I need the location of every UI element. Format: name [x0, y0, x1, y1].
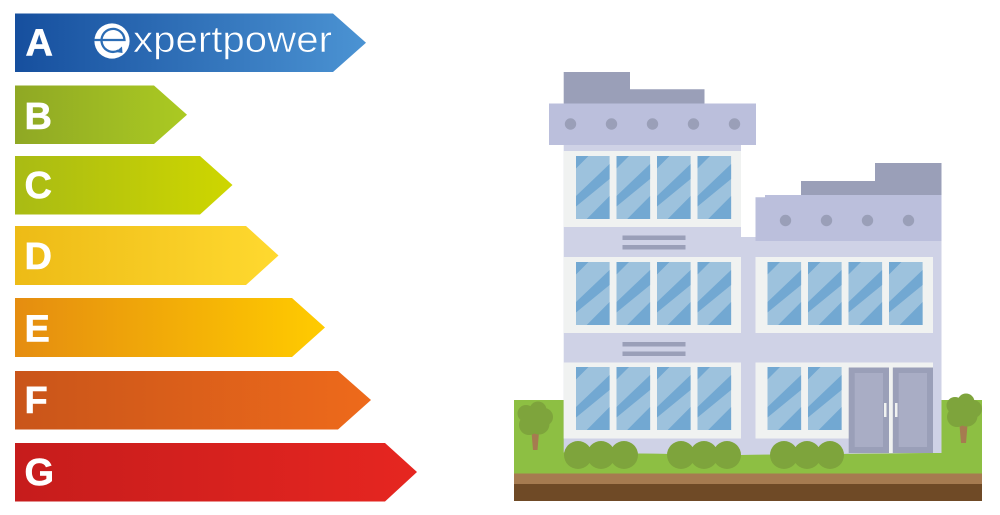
windows [576, 156, 923, 430]
double door [849, 368, 933, 453]
window frames [564, 151, 933, 438]
tree right [946, 394, 982, 443]
arrow G [15, 443, 417, 502]
arrow A with logo: A [26, 22, 53, 64]
front grass [564, 452, 942, 474]
shrubs [564, 441, 844, 469]
rooftop panel right [756, 195, 942, 241]
logo: expertpower: xpertpower [133, 19, 332, 60]
arrow E: E [24, 308, 50, 350]
arrow F: F [24, 380, 48, 422]
arrow B [15, 86, 187, 144]
arrow D: D [24, 236, 52, 278]
arrow D [15, 226, 278, 285]
rooftop units left [564, 72, 704, 104]
building illustration [514, 72, 982, 501]
tree left [518, 402, 553, 450]
vent lines [622, 236, 686, 356]
arrow E [15, 298, 325, 357]
rooftop panel left [549, 104, 756, 145]
arrow B: B [24, 96, 52, 138]
arrow G: G [24, 452, 54, 494]
walls [564, 145, 942, 455]
arrow C [15, 156, 232, 214]
energy rating scale [15, 14, 417, 502]
arrow F [15, 371, 371, 430]
ground: grass and soil [514, 400, 982, 501]
rooftop units right [801, 163, 942, 196]
arrow C: C [24, 165, 52, 207]
arrow A with logo [15, 14, 366, 72]
